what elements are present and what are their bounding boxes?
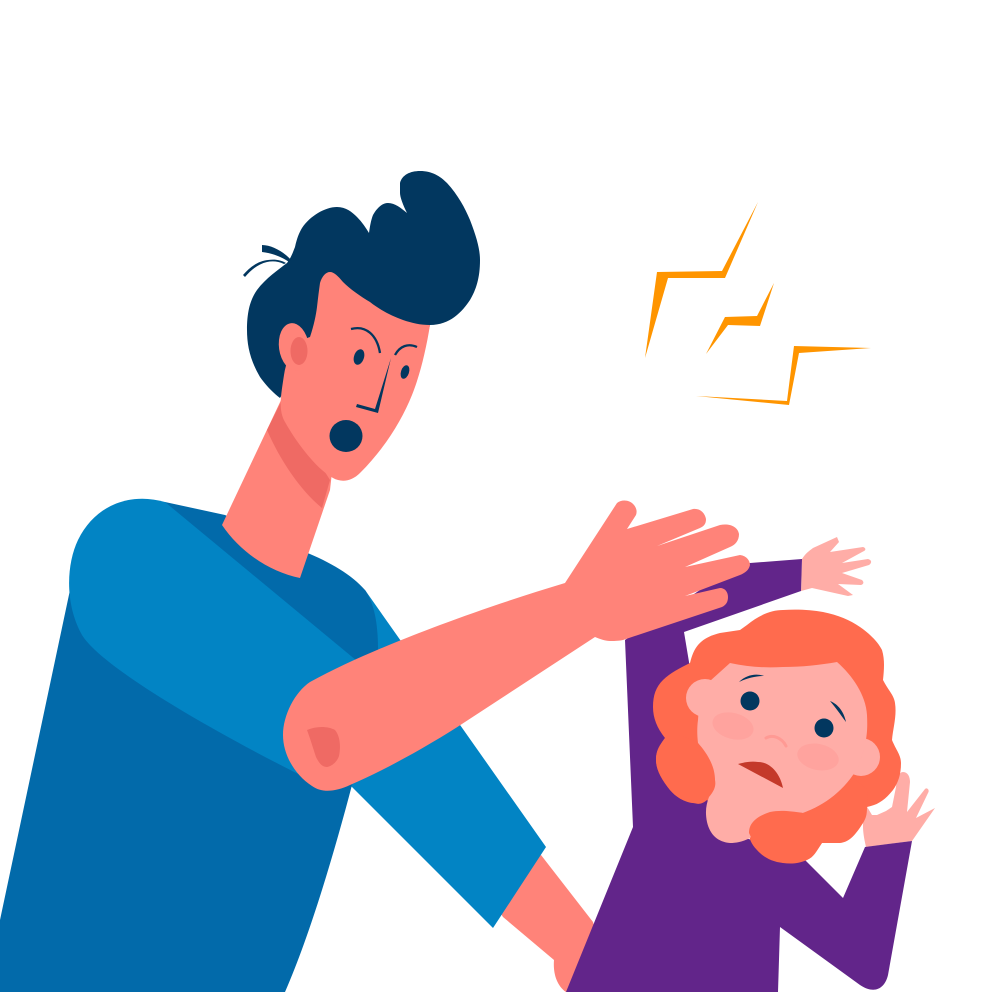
bolt: right <box>696 346 871 405</box>
lightning bolts <box>645 202 871 405</box>
girl's mouth <box>738 762 783 788</box>
girl <box>566 537 935 992</box>
man's torso <box>0 502 378 992</box>
girl's eyebrows <box>739 675 846 722</box>
man's nose <box>356 358 391 413</box>
girl's lower hand <box>863 772 935 847</box>
man's rear hand and forearm <box>480 855 600 992</box>
man's eyebrows <box>351 328 417 355</box>
inner ear <box>290 337 308 365</box>
girl's nose <box>766 736 786 746</box>
girl's front hair lock <box>749 778 868 863</box>
man's eyes <box>352 348 411 380</box>
man's elbow mark <box>307 727 340 767</box>
girl's raised hand <box>801 537 871 596</box>
man's neck <box>222 398 340 578</box>
man's raised arm and hand <box>283 501 750 791</box>
girl's side hair lock <box>656 735 715 803</box>
man's shoulder sleeve <box>69 499 380 780</box>
girl's left ear <box>686 679 724 717</box>
man's rear sleeve <box>340 590 546 928</box>
bolt: small <box>706 283 774 354</box>
girl's face <box>697 662 867 843</box>
man's head <box>243 171 480 481</box>
neck shadow <box>267 402 330 508</box>
ear <box>276 321 312 373</box>
girl's right ear <box>842 738 880 776</box>
girl's hair <box>653 610 901 864</box>
hair <box>247 171 480 398</box>
bolt: large <box>645 202 758 358</box>
girl's cheeks <box>709 708 841 774</box>
girl's eyes <box>740 692 834 738</box>
girl's dress and arms <box>566 559 912 992</box>
man's mouth <box>330 420 362 452</box>
face <box>281 272 430 481</box>
stray hairs <box>243 245 291 277</box>
